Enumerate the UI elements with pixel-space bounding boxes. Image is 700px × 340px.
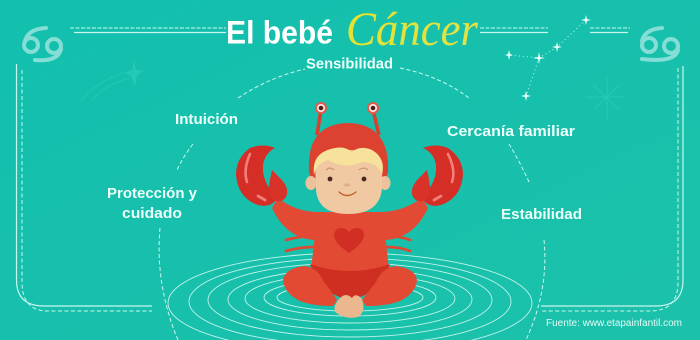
label: Protección y cuidado: Protección y <box>107 185 198 202</box>
title: Cáncer <box>346 3 478 56</box>
icon: faint shooting star <box>80 60 143 102</box>
title: El bebé <box>226 14 333 50</box>
ears <box>306 176 390 190</box>
hood <box>309 123 388 184</box>
icon: cancer symbol right <box>642 28 678 60</box>
left claw <box>236 146 287 206</box>
label: Protección y cuidado <box>107 185 198 222</box>
eyes and smile <box>326 168 368 196</box>
torso <box>311 225 389 280</box>
hair <box>314 148 383 175</box>
constellation <box>505 15 591 101</box>
diaper <box>310 264 390 300</box>
label: Estabilidad: Estabilidad <box>501 206 582 223</box>
feet <box>335 295 363 318</box>
legs <box>283 266 337 306</box>
title <box>226 3 478 56</box>
concentric rings <box>168 253 532 340</box>
antennae and eyes <box>315 102 379 135</box>
face <box>315 150 382 214</box>
label: Protección y cuidado: cuidado <box>122 205 182 222</box>
heart <box>334 228 364 253</box>
frame: double border <box>16 28 683 311</box>
baby crab illustration <box>236 102 463 318</box>
label: Intuición: Intuición <box>175 111 238 128</box>
icon: cancer symbol left <box>24 28 61 60</box>
label: Sensibilidad: Sensibilidad <box>306 56 393 72</box>
label: Cercanía familiar: Cercanía familiar <box>447 123 575 140</box>
arms <box>272 198 428 240</box>
icon: faint star <box>586 77 625 120</box>
crab legs <box>286 236 410 251</box>
right claw <box>412 146 463 206</box>
dashed circle arcs <box>159 68 545 340</box>
source credit: Fuente: www.etapainfantil.com <box>546 318 682 329</box>
